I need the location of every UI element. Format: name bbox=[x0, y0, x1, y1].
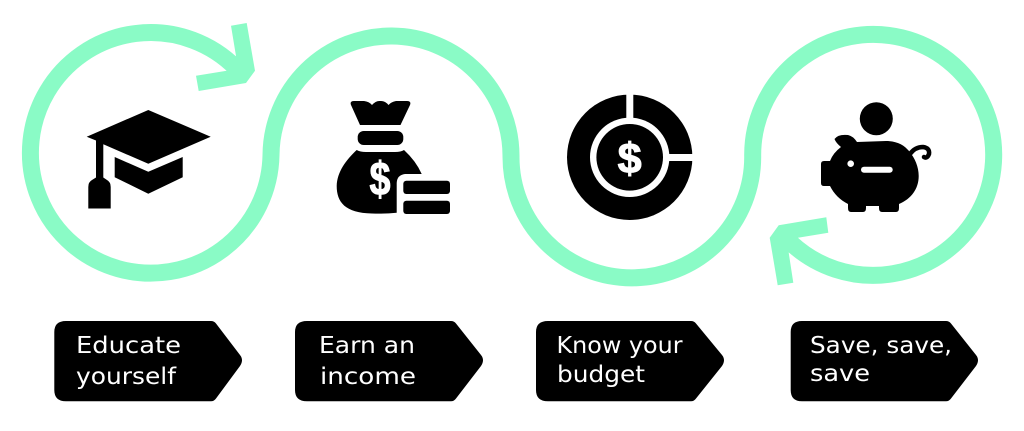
tag: know your budget bbox=[536, 321, 724, 401]
tag: educate yourself: yourself bbox=[76, 362, 177, 390]
icon: budget donut chart bbox=[567, 92, 695, 220]
icon: graduation cap bbox=[87, 110, 211, 208]
winding path with arrows bbox=[30, 23, 994, 285]
tag: earn an income bbox=[295, 321, 483, 401]
tag: educate yourself bbox=[54, 321, 242, 401]
tag: save, save, save bbox=[791, 321, 978, 401]
arrow head: end bbox=[770, 217, 828, 285]
tag: save, save, save: save bbox=[810, 359, 870, 387]
icon: money bag: $ bbox=[370, 152, 390, 205]
icon: piggy bank bbox=[821, 102, 929, 212]
icon: money bag bbox=[337, 101, 450, 214]
tag: educate yourself: Educate bbox=[76, 331, 181, 359]
curved line bbox=[30, 33, 994, 278]
tag: know your budget: budget bbox=[557, 360, 645, 388]
tag: know your budget: Know your bbox=[556, 331, 683, 359]
tag: earn an income: income bbox=[320, 362, 416, 390]
icon: budget donut chart: $ bbox=[618, 135, 642, 183]
arrow head: start bbox=[196, 23, 255, 91]
tag: save, save, save: Save, save, bbox=[810, 331, 952, 359]
tag: earn an income: Earn an bbox=[319, 331, 415, 359]
